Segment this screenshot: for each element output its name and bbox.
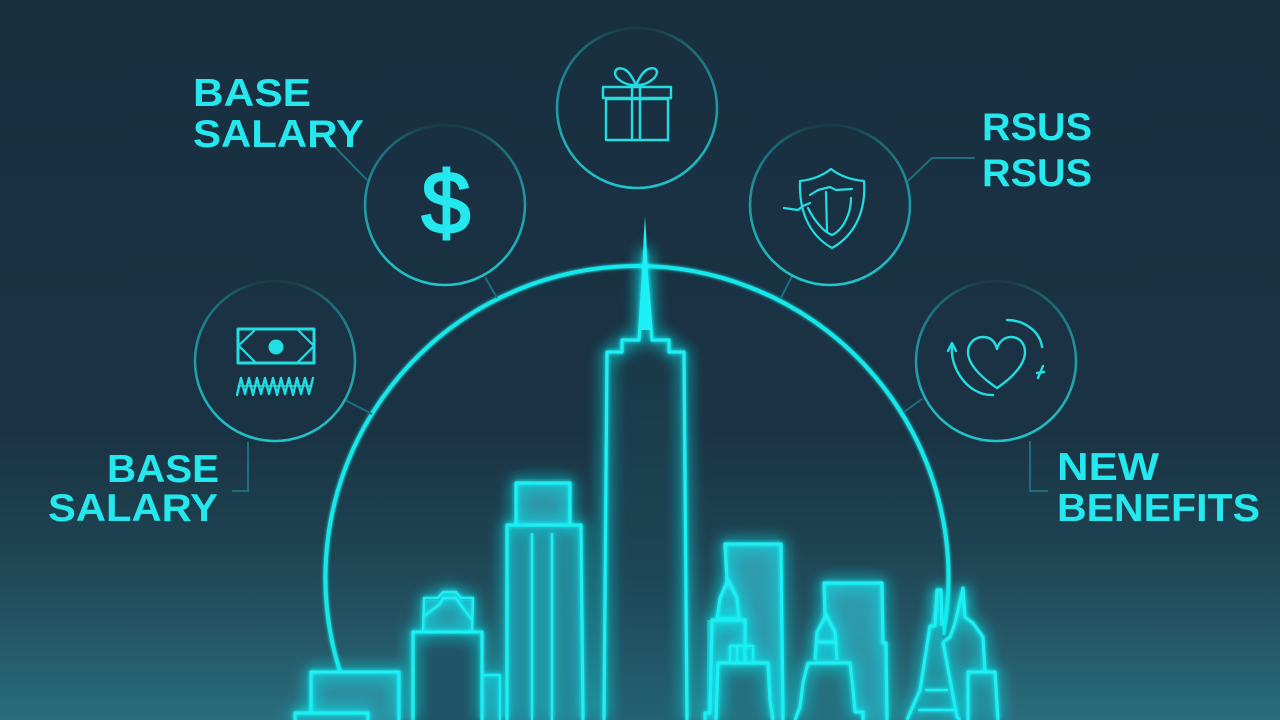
panel: shield circle: [750, 125, 910, 285]
icon: shield: [784, 169, 864, 248]
icon: heart with arrows: [948, 320, 1044, 395]
label: new benefits: [1057, 446, 1260, 530]
label: rsus: [982, 106, 1092, 195]
icon: scribbled caption: [237, 378, 313, 395]
label: base salary top: [193, 72, 364, 156]
large dome arc: [325, 266, 948, 670]
label: base salary left: SALARY: [48, 487, 218, 530]
panel: dollar circle: [365, 125, 525, 285]
building: crown tower: [413, 592, 500, 720]
label: base salary left: [48, 448, 219, 530]
connector lines: [232, 147, 1048, 491]
panel: heart circle: [916, 281, 1076, 441]
building: stepped tower pair: [795, 583, 887, 720]
building: twin spires: [907, 588, 998, 720]
label: rsus: RSUS: [982, 106, 1092, 149]
spire: [640, 216, 650, 330]
label: rsus: RSUS: [982, 152, 1092, 195]
label: base salary top: SALARY: [193, 113, 364, 156]
panel: gift circle: [557, 28, 717, 188]
panel: banknote circle: [195, 281, 355, 441]
icon: dollar sign: $: [422, 153, 470, 252]
icon: gift box: [603, 68, 671, 140]
label: base salary top: BASE: [193, 72, 311, 115]
building: central skyscraper: [604, 216, 687, 720]
skyline: [295, 216, 998, 720]
building: low left block: [295, 672, 399, 720]
building: twin-line tower: [507, 483, 583, 720]
label: base salary left: BASE: [107, 448, 219, 491]
building: right tower pair: [705, 544, 783, 720]
icon: banknote: [237, 329, 314, 395]
label: new benefits: NEW: [1057, 446, 1159, 489]
label: new benefits: BENEFITS: [1057, 487, 1260, 530]
